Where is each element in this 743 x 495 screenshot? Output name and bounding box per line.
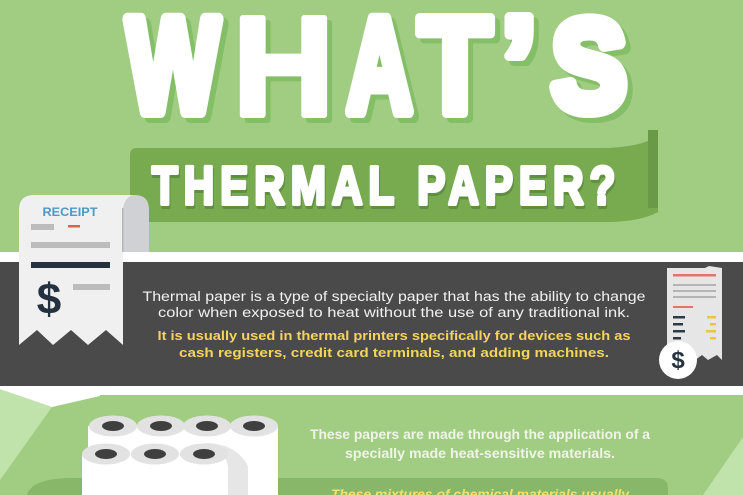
banner title text: THERMAL PAPER? xyxy=(152,156,615,216)
title: WHAT'S xyxy=(127,0,631,150)
darker text panel xyxy=(27,478,668,495)
icon: large receipt xyxy=(19,195,149,345)
panel: lower section xyxy=(0,386,743,495)
title: WHAT'S: A xyxy=(352,0,417,146)
description text: Thermal paper is a type of specialty paper that has the ability to change xyxy=(142,289,646,304)
highlighted description text: It is usually used in thermal printers specifically for devices such as xyxy=(158,328,630,343)
panel: header background xyxy=(0,0,743,252)
title: WHAT'S: S xyxy=(557,0,631,143)
band: dark description panel: color when exposed to heat without the use of any traditional ink. xyxy=(158,305,630,320)
banner: thermal paper xyxy=(130,130,658,222)
process text: These papers are made through the application of a xyxy=(310,426,650,442)
decorative facet right xyxy=(703,437,743,495)
coin dollar sign: $ xyxy=(671,347,685,374)
banner title text: THERMAL PAPER? xyxy=(153,159,616,219)
title: WHAT'S: W xyxy=(132,0,224,146)
dollar sign: $ xyxy=(37,275,61,324)
icon: paper rolls xyxy=(82,416,278,495)
white notch xyxy=(0,386,100,407)
decorative facet left xyxy=(0,389,52,480)
icon: small receipt with coin xyxy=(659,266,722,379)
panel: lower section: specially made heat-sensitive materials. xyxy=(345,445,615,461)
band: dark description panel xyxy=(0,252,743,386)
receipt label: RECEIPT xyxy=(42,207,98,219)
band: dark description panel: cash registers, credit card terminals, and adding machines. xyxy=(179,345,609,360)
